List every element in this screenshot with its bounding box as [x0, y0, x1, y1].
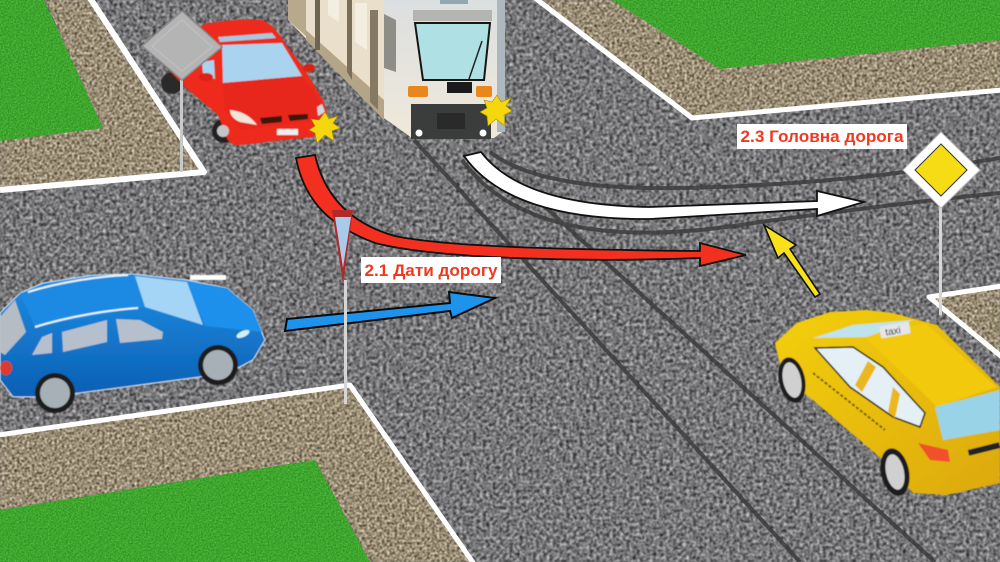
- sign: priority road reverse (grey): [142, 11, 222, 172]
- label: 2.1 give way: [361, 257, 501, 283]
- tram: [288, 0, 505, 139]
- collision star: tram: [480, 95, 512, 126]
- tram tracks: [414, 140, 1000, 562]
- arrow: white: [464, 152, 864, 219]
- arrow: yellow: [764, 225, 820, 297]
- corner: top right: [535, 0, 1000, 118]
- corner: top left: [0, 0, 205, 190]
- blue car: [0, 274, 265, 413]
- corner: right: [929, 286, 1000, 357]
- sign: give way: [332, 210, 353, 404]
- arrow: blue: [285, 292, 495, 331]
- taxi: [775, 310, 1000, 498]
- label: 2.1 give way: 2.1 Дати дорогу: [364, 261, 498, 280]
- sign: main road: [903, 132, 980, 315]
- arrow: red: [296, 155, 746, 266]
- collision star: red car: [309, 112, 340, 143]
- corner: bottom left: [0, 385, 474, 562]
- red car: [161, 20, 327, 145]
- label: 2.3 main road: 2.3 Головна дорога: [740, 127, 904, 146]
- taxi: taxi: [884, 325, 902, 339]
